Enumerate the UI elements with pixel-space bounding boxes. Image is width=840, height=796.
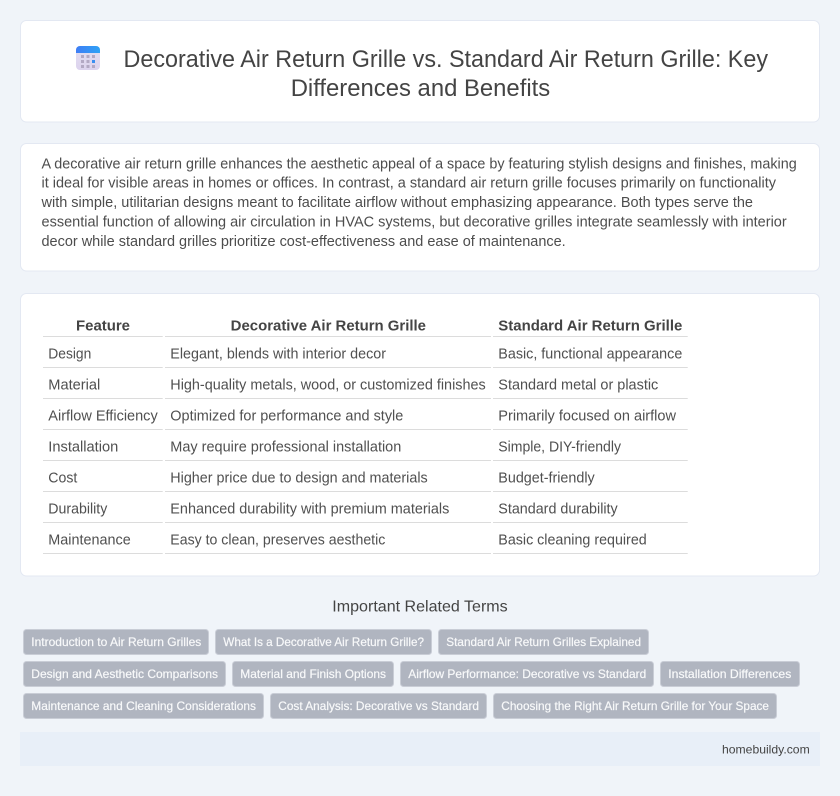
row: durability: Enhanced durability with premium materials	[170, 501, 449, 517]
row: design: Elegant, blends with interior decor	[170, 346, 386, 362]
row: installation: Simple, DIY-friendly	[498, 439, 622, 455]
row: airflow efficiency: Primarily focused on airflow	[498, 408, 677, 424]
row: material: Material	[48, 377, 100, 393]
tag: what is decorative	[216, 630, 432, 654]
tag: maintenance considerations: Maintenance and Cleaning Considerations	[31, 699, 256, 713]
row: design: Design	[48, 346, 91, 362]
tag: airflow performance: Airflow Performance: Decorative vs Standard	[408, 667, 646, 681]
row: cost: Higher price due to design and materials	[170, 470, 428, 486]
tag: choosing the right grille: Choosing the Right Air Return Grille for Your Space	[501, 699, 769, 713]
title heading: Decorative Air Return Grille vs. Standard Air Return Grille: Key	[124, 46, 768, 73]
tag: installation differences	[660, 662, 800, 686]
intro paragraph: essential function of allowing air circulation in HVAC systems, but decorative grilles integrate seamlessly with interior	[42, 215, 787, 231]
row: cost: Cost	[48, 470, 77, 486]
row: design: Basic, functional appearance	[498, 346, 682, 362]
tag: design comparisons	[24, 662, 226, 686]
related terms heading: Important Related Terms	[332, 599, 508, 616]
row: maintenance: Basic cleaning required	[498, 532, 647, 548]
row: airflow efficiency: Airflow Efficiency	[48, 408, 159, 424]
tag: introduction	[24, 630, 208, 654]
row: installation: May require professional installation	[170, 439, 401, 455]
intro paragraph	[40, 156, 797, 250]
row: design	[43, 346, 688, 368]
row: maintenance: Easy to clean, preserves aesthetic	[170, 532, 385, 548]
row: cost	[43, 470, 688, 492]
row: cost: Budget-friendly	[498, 470, 595, 486]
intro paragraph: A decorative air return grille enhances the aesthetic appeal of a space by featuring stylish designs and finishes, making	[42, 156, 797, 172]
intro paragraph: decor while standard grilles prioritize cost-effectiveness and ease of maintenance.	[42, 234, 566, 250]
panel: introduction	[20, 144, 820, 271]
intro paragraph: it ideal for visible areas in homes or offices. In contrast, a standard air return grille focuses primarily on functionality	[42, 176, 777, 192]
intro paragraph: with simple, utilitarian designs meant to facilitate airflow without emphasizing appearance. Both types serve the	[40, 195, 753, 211]
footer site name: homebuildy.com	[722, 742, 810, 756]
tag: airflow performance	[400, 662, 654, 686]
title heading: Differences and Benefits	[291, 75, 550, 102]
table header row: Standard Air Return Grille	[498, 319, 682, 335]
title heading	[124, 46, 768, 102]
footer bar	[20, 732, 820, 766]
row: maintenance: Maintenance	[48, 532, 131, 548]
tag: standard explained	[438, 630, 648, 654]
tag: choosing the right grille	[494, 694, 776, 718]
table header row	[43, 319, 688, 336]
panel: title card	[20, 20, 820, 122]
row: durability: Standard durability	[498, 501, 618, 517]
panel: related term tags	[24, 630, 800, 718]
tag: design comparisons: Design and Aesthetic Comparisons	[31, 667, 218, 681]
tag: installation differences: Installation Differences	[668, 667, 791, 681]
tag: what is decorative: What Is a Decorative Air Return Grille?	[223, 635, 424, 649]
table header row: Decorative Air Return Grille	[231, 319, 426, 335]
icon: calendar	[76, 46, 100, 70]
tag: material options	[232, 662, 394, 686]
row: durability: Durability	[48, 501, 108, 517]
row: maintenance	[43, 532, 688, 554]
row: installation	[43, 439, 688, 460]
row: airflow efficiency	[43, 408, 688, 430]
row: airflow efficiency: Optimized for performance and style	[170, 408, 403, 424]
row: material	[43, 377, 688, 398]
row: installation: Installation	[48, 439, 118, 455]
tag: cost analysis: Cost Analysis: Decorative vs Standard	[278, 699, 479, 713]
row: material: Standard metal or plastic	[498, 377, 658, 393]
row: durability	[43, 501, 688, 522]
tag: cost analysis	[270, 694, 486, 718]
tag: maintenance considerations	[24, 694, 264, 718]
panel: comparison table	[20, 294, 820, 576]
tag: standard explained: Standard Air Return Grilles Explained	[446, 635, 641, 649]
tag: introduction: Introduction to Air Return Grilles	[31, 635, 201, 649]
table header row: Feature	[76, 319, 130, 335]
row: material: High-quality metals, wood, or customized finishes	[170, 377, 486, 393]
tag: material options: Material and Finish Options	[240, 667, 386, 681]
